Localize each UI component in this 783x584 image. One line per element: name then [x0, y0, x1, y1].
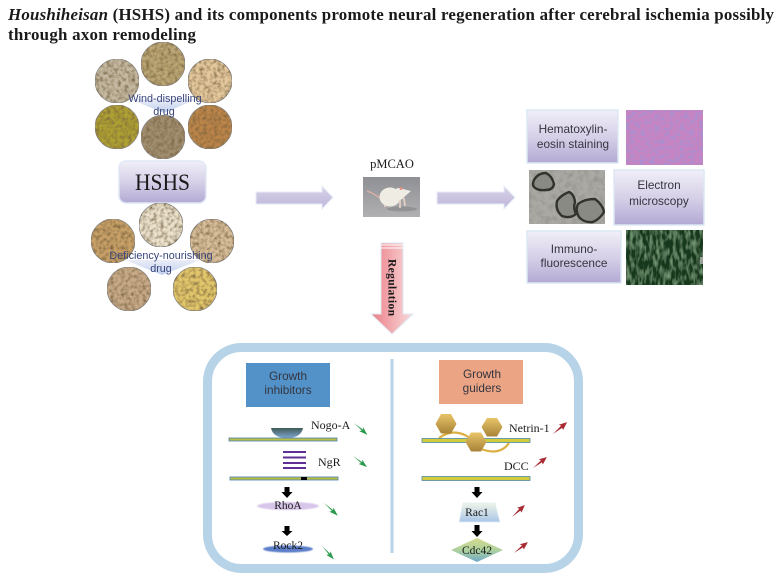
title: through axon remodeling — [8, 25, 197, 44]
Netrin-1: Netrin-1 — [509, 421, 550, 435]
Rock2 — [263, 540, 313, 552]
arrow: HSHS to pMCAO — [256, 186, 333, 209]
label: Regulation: Regulation — [386, 259, 398, 317]
title: Houshiheisan (HSHS) and its components promote neural regeneration after cerebral ischemia possibly — [7, 5, 775, 24]
arrow: regulation — [371, 243, 413, 334]
icon: up arrow Cdc42 — [512, 540, 530, 556]
label: wind-dispelling drug — [128, 93, 202, 118]
Rac1: Rac1 — [465, 507, 489, 519]
icon: blue pointer behind label — [125, 260, 200, 275]
DCC — [422, 459, 530, 480]
heading box: HSHS — [119, 161, 206, 203]
label: deficiency-nourishing drug — [109, 250, 213, 275]
box: growth guiders: Growth — [463, 367, 501, 381]
image: H&E micrograph — [626, 110, 703, 165]
box: immunofluorescence: Immuno- — [551, 242, 597, 256]
box: electron microscopy: microscopy — [629, 194, 689, 208]
icon: up arrow DCC — [531, 455, 549, 471]
icon: black arrow to Cdc42 — [472, 525, 482, 537]
heading box: HSHS: HSHS — [135, 170, 190, 195]
box: hematoxylin-eosin staining — [527, 110, 618, 163]
panel: deficiency-nourishing herbs — [91, 203, 234, 311]
Cdc42: Cdc42 — [462, 545, 492, 557]
icon: up arrow Netrin-1 — [551, 420, 569, 437]
Rock2: Rock2 — [273, 540, 303, 552]
icon: blue pointer behind label — [130, 99, 197, 113]
box: growth guiders — [439, 360, 523, 404]
label: deficiency-nourishing drug: Deficiency-nourishing — [109, 250, 213, 262]
box: electron microscopy: Electron — [637, 178, 681, 192]
icon: down arrow Nogo-A — [352, 422, 370, 436]
RhoA — [257, 500, 319, 512]
label: wind-dispelling drug: Wind-dispelling — [128, 93, 202, 105]
box: growth guiders: guiders — [463, 381, 501, 395]
panel: regulation pathways — [208, 348, 578, 568]
icon: black arrow to Rock2 — [282, 526, 292, 536]
image: white rat — [363, 177, 420, 217]
label: deficiency-nourishing drug: drug — [150, 263, 172, 275]
box: electron microscopy — [614, 170, 704, 225]
box: hematoxylin-eosin staining: Hematoxylin- — [539, 122, 607, 136]
label: pMCAO: pMCAO — [370, 157, 414, 171]
box: hematoxylin-eosin staining: eosin staining — [537, 137, 609, 151]
box: growth inhibitors: inhibitors — [264, 383, 312, 397]
Nogo-A: Nogo-A — [311, 418, 351, 432]
NgR: NgR — [318, 455, 341, 469]
image: green fluorescence micrograph — [626, 230, 703, 285]
box: immunofluorescence: fluorescence — [541, 256, 608, 270]
Nogo-A — [229, 418, 351, 441]
RhoA: RhoA — [274, 500, 302, 512]
NgR — [230, 452, 341, 480]
icon: down arrow NgR — [351, 455, 369, 468]
Netrin-1 — [422, 414, 550, 452]
box: growth inhibitors — [246, 363, 330, 407]
icon: down arrow Rock2 — [319, 545, 337, 560]
panel: wind-dispelling herbs — [95, 42, 232, 159]
icon: black arrow to Rac1 — [472, 487, 482, 498]
label: wind-dispelling drug: drug — [153, 106, 175, 118]
box: growth inhibitors: Growth — [269, 369, 307, 383]
title — [7, 5, 775, 44]
icon: black arrow to RhoA — [282, 487, 292, 498]
DCC: DCC — [504, 459, 529, 473]
arrow: pMCAO to staining methods — [437, 186, 515, 209]
icon: up arrow Rac1 — [510, 503, 527, 519]
image: electron micrograph — [529, 170, 605, 224]
icon: down arrow RhoA — [322, 502, 340, 517]
box: immunofluorescence — [527, 231, 621, 283]
Cdc42 — [451, 538, 503, 562]
Rac1 — [459, 503, 500, 522]
